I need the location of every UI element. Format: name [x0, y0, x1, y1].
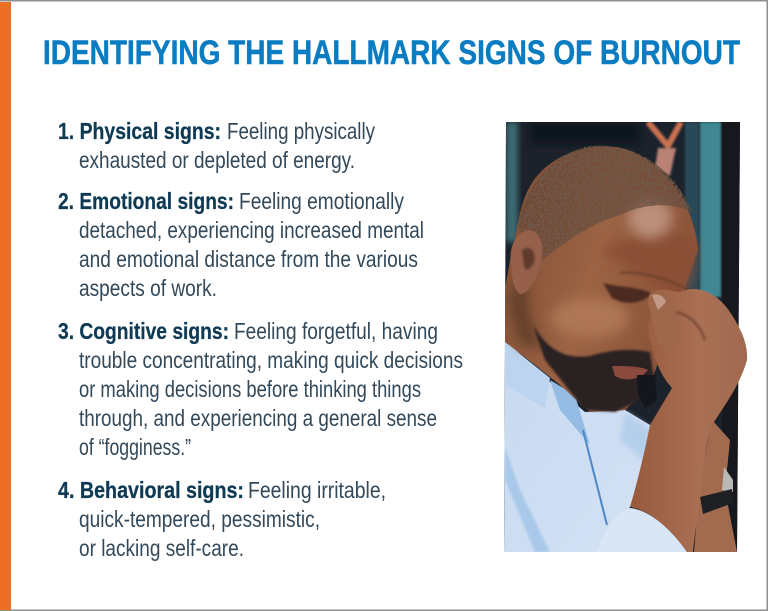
- orange side bar: [0, 2, 11, 610]
- list item 2: emotional signs: detached, experiencing increased mental: [79, 217, 424, 243]
- list item 2: emotional signs: and emotional distance from the various: [79, 246, 418, 272]
- list item 3: cognitive signs: Feeling forgetful, having: [234, 318, 438, 344]
- man's second arm and watch: [694, 420, 737, 552]
- man's beard and mouth: [533, 325, 657, 412]
- list item 1: physical signs: exhausted or depleted of energy.: [79, 147, 355, 173]
- list item 3: cognitive signs: or making decisions before thinking things: [79, 376, 421, 402]
- man's ear: [510, 230, 542, 294]
- list item 4: behavioral signs: or lacking self-care.: [79, 535, 244, 561]
- list item 2: emotional signs: 2. Emotional signs:: [58, 188, 234, 214]
- list item 4: behavioral signs: Feeling irritable,: [248, 477, 386, 503]
- list item 1: physical signs: [58, 118, 375, 173]
- list item 3: cognitive signs: of “fogginess.”: [79, 434, 191, 460]
- man's hand and forearm: [630, 289, 747, 552]
- man's shirt: [504, 340, 687, 552]
- man's scalp hair: [518, 146, 692, 261]
- photo: stressed man pinching the bridge of his nose: [500, 120, 747, 555]
- list item 1: physical signs: Feeling physically: [227, 118, 375, 144]
- list item 2: emotional signs: [58, 188, 424, 301]
- photo background: [500, 120, 745, 555]
- list item 1: physical signs: 1. Physical signs:: [58, 118, 221, 144]
- list item 3: cognitive signs: trouble concentrating, making quick decisions: [79, 347, 463, 373]
- list item 2: emotional signs: Feeling emotionally: [239, 188, 404, 214]
- list item 3: cognitive signs: 3. Cognitive signs:: [58, 318, 229, 344]
- list item 4: behavioral signs: 4. Behavioral signs:: [58, 477, 244, 503]
- man's head and neck: [505, 146, 698, 412]
- list item 4: behavioral signs: [58, 477, 386, 561]
- list item 3: cognitive signs: [58, 318, 463, 460]
- list item 3: cognitive signs: through, and experiencing a general sense: [79, 405, 437, 431]
- list item 2: emotional signs: aspects of work.: [79, 275, 217, 301]
- list item 4: behavioral signs: quick-tempered, pessimistic,: [79, 506, 320, 532]
